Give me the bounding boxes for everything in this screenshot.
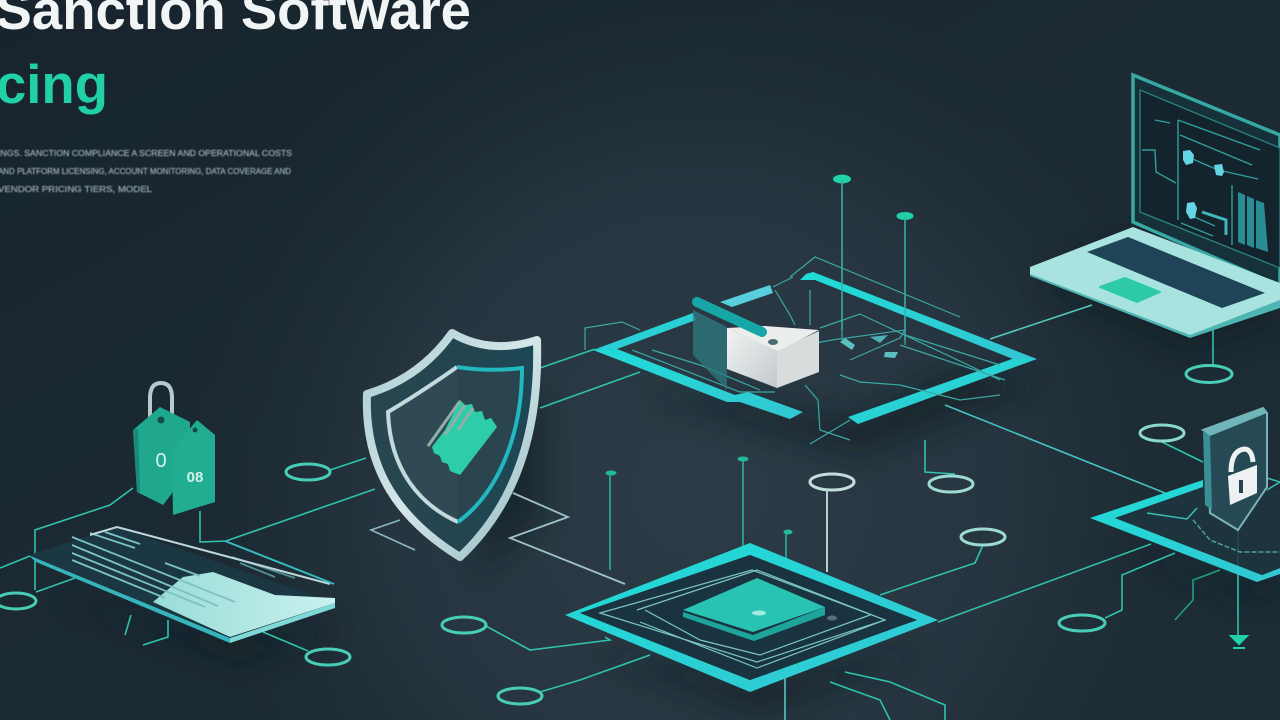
laptop screen bbox=[1133, 75, 1280, 286]
drop shadows bbox=[60, 240, 1280, 715]
laptop nodes bbox=[1183, 150, 1224, 219]
panel: central chip bbox=[565, 543, 938, 692]
platform frame bbox=[1090, 480, 1280, 582]
platform circuit traces bbox=[585, 180, 1005, 444]
shield emblem bbox=[428, 400, 497, 475]
node rings bbox=[0, 366, 1232, 704]
description text: VENDOR PRICING TIERS, MODEL bbox=[0, 185, 153, 194]
shackle bbox=[150, 383, 172, 425]
panel: document card bbox=[28, 527, 335, 643]
laptop screen chart lines bbox=[1142, 120, 1260, 245]
card body bbox=[28, 527, 335, 637]
panel: laptop bbox=[1030, 75, 1280, 338]
connector lines bbox=[0, 305, 1238, 720]
card text lines bbox=[72, 532, 295, 607]
panel: padlock tags: 08 bbox=[187, 469, 203, 486]
shield inner right half bbox=[457, 367, 522, 522]
shield outer bbox=[367, 333, 537, 557]
connector left of shield bbox=[371, 520, 415, 550]
keyboard bbox=[1087, 237, 1265, 308]
white box bbox=[727, 326, 819, 388]
glass panel bbox=[693, 310, 727, 390]
left tag bbox=[133, 407, 190, 505]
card edge bbox=[90, 527, 330, 584]
panel: top isometric platform bbox=[585, 180, 1037, 444]
pin markers bbox=[606, 174, 1247, 648]
description text: INGS. SANCTION COMPLIANCE A SCREEN AND OPERATIONAL COSTS bbox=[0, 149, 292, 158]
title bbox=[0, 0, 471, 115]
lock shield bbox=[1203, 408, 1267, 530]
laptop base bbox=[1030, 267, 1280, 338]
description text bbox=[0, 149, 292, 194]
chip frame bbox=[565, 543, 938, 692]
panel: padlock tags: 0 bbox=[155, 450, 167, 472]
laptop bars bbox=[1238, 192, 1268, 252]
panel: padlock tags bbox=[133, 383, 215, 515]
panel: shield bbox=[367, 333, 537, 557]
lock icon bbox=[1231, 449, 1253, 472]
card light panel bbox=[153, 572, 335, 637]
description text: AND PLATFORM LICENSING, ACCOUNT MONITORING, DATA COVERAGE AND bbox=[0, 167, 291, 176]
right tag bbox=[172, 420, 215, 515]
teal roller bbox=[697, 302, 762, 332]
chip core bbox=[683, 607, 825, 641]
connector from shield to chip bbox=[510, 493, 625, 584]
platform frame bbox=[593, 272, 1037, 424]
panel: right platform and lock shield bbox=[1090, 408, 1280, 582]
map shapes bbox=[840, 338, 855, 350]
trackpad bbox=[1100, 278, 1160, 302]
chip traces bbox=[600, 570, 885, 668]
shield inner left half bbox=[388, 367, 458, 522]
